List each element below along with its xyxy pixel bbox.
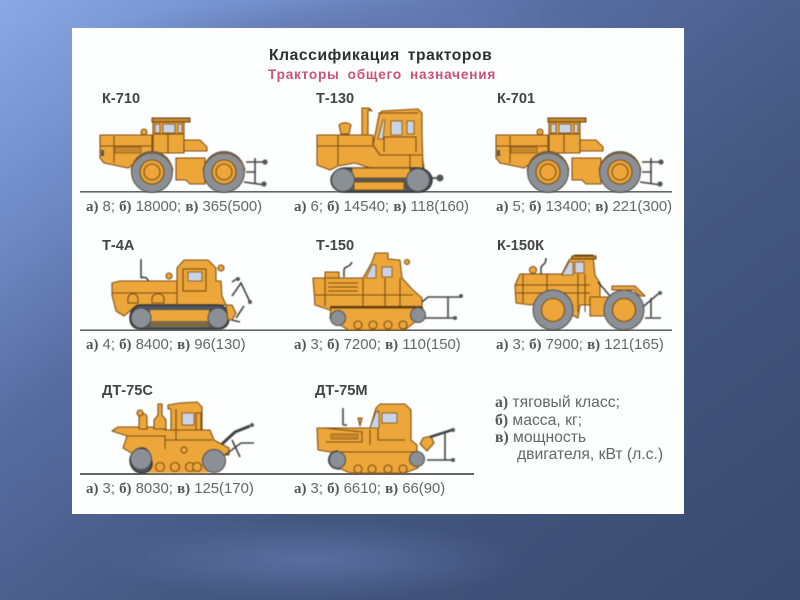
specs: а) 8; б) 18000; в) 365(500): [86, 199, 262, 215]
legend line в continued: двигателя, кВт (л.с.): [517, 446, 663, 463]
icon: К-710 wheeled tractor: [100, 118, 268, 192]
model name: ДТ-75М: [315, 383, 368, 399]
specs: а) 6; б) 14540; в) 118(160): [294, 199, 469, 215]
icon: ДТ-75М crawler tractor: [317, 404, 455, 473]
model name: К-150К: [497, 238, 544, 254]
title: Классификация тракторов: [269, 47, 492, 64]
model name: Т-150: [316, 238, 354, 254]
model name: Т-130: [316, 91, 354, 107]
legend: [495, 394, 663, 463]
icon: К-701 wheeled tractor: [496, 118, 664, 192]
tractor entry: ДТ-75С: [86, 383, 254, 497]
model name: К-701: [497, 91, 535, 107]
tractor entry: К-701: [496, 91, 672, 215]
legend line б: б) масса, кг;: [495, 412, 582, 429]
tractor entry: Т-150: [294, 238, 463, 353]
tractor entry: Т-4А: [86, 238, 252, 353]
tractor entry: К-150К: [496, 238, 664, 353]
icon: ДТ-75С crawler tractor: [112, 402, 254, 473]
specs: а) 5; б) 13400; в) 221(300): [496, 199, 672, 215]
specs: а) 4; б) 8400; в) 96(130): [86, 337, 246, 353]
icon: К-150К wheeled tractor: [515, 255, 662, 330]
specs: а) 3; б) 6610; в) 66(90): [294, 481, 445, 497]
icon: Т-150 crawler tractor: [313, 253, 463, 330]
legend line а: а) тяговый класс;: [495, 394, 620, 411]
tractor entry: К-710: [86, 91, 268, 215]
tractor entry: ДТ-75М: [294, 383, 455, 497]
legend line в: в) мощность: [495, 429, 586, 446]
ground line: row 1: [80, 191, 672, 193]
icon: Т-130 crawler tractor: [317, 108, 444, 192]
model name: ДТ-75С: [102, 383, 153, 399]
specs: а) 3; б) 7900; в) 121(165): [496, 337, 664, 353]
icon: Т-4А crawler tractor: [112, 259, 252, 329]
panel: white sheet: [72, 28, 684, 514]
specs: а) 3; б) 7200; в) 110(150): [294, 337, 461, 353]
model name: К-710: [102, 91, 140, 107]
specs: а) 3; б) 8030; в) 125(170): [86, 481, 254, 497]
subtitle: Тракторы общего назначения: [268, 67, 496, 82]
model name: Т-4А: [102, 238, 135, 254]
ground line: row 3: [80, 473, 474, 475]
ground line: row 2: [80, 329, 672, 331]
tractor entry: Т-130: [294, 91, 469, 215]
